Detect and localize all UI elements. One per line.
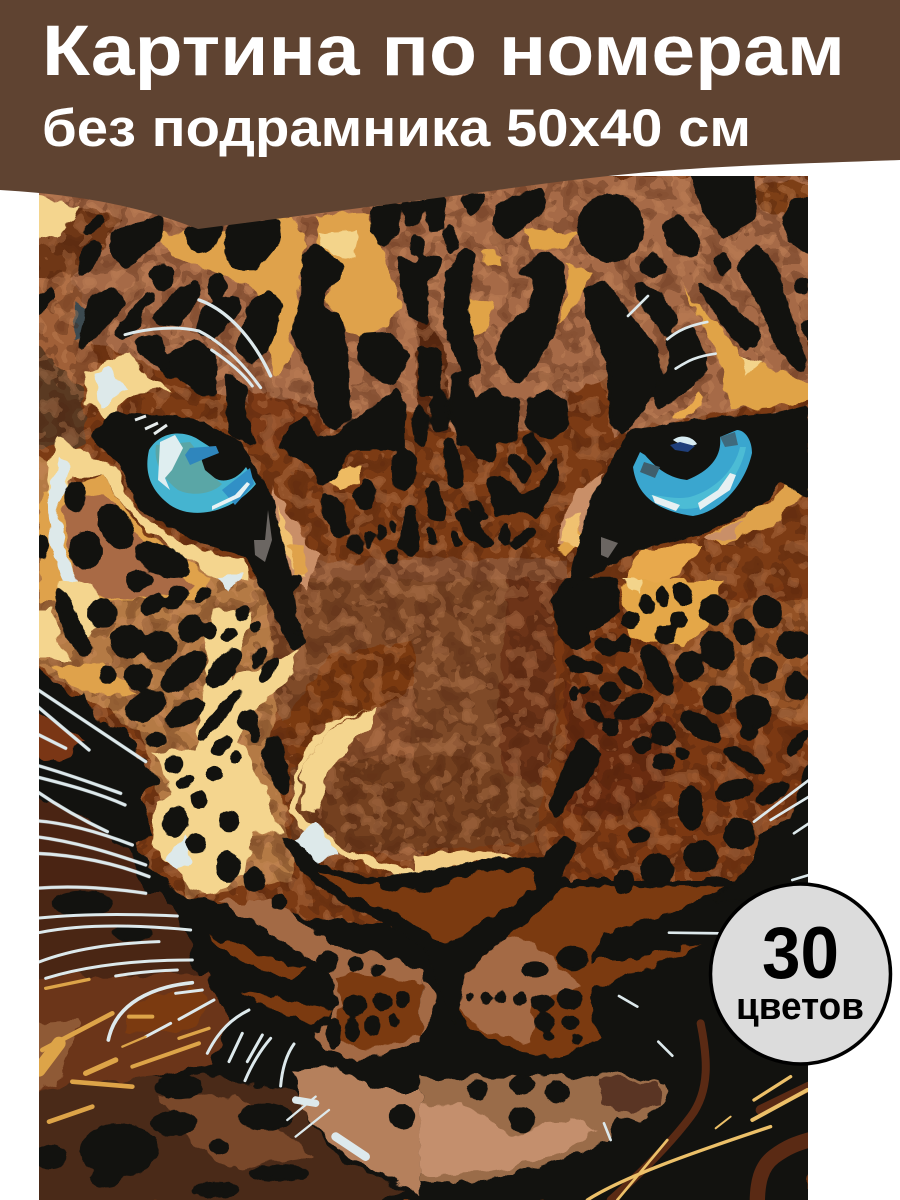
cream band under left eye	[39, 437, 319, 600]
forehead right	[421, 173, 811, 444]
nose rust fill	[318, 868, 537, 945]
left pad	[219, 900, 426, 1060]
header banner	[0, 0, 900, 229]
mottled fur texture: light	[39, 176, 808, 923]
left eye socket	[89, 413, 300, 640]
bottom left and mouth	[29, 890, 426, 1200]
painting: leopard face	[29, 173, 812, 1200]
center between eyes	[309, 428, 568, 584]
right cheek	[410, 576, 808, 820]
grey mark	[601, 537, 618, 558]
bottom right and right pad	[421, 880, 811, 1200]
left eye glint lines	[135, 416, 167, 434]
subtitle: без подрамника 50х40 см	[42, 99, 751, 158]
left eye	[89, 413, 300, 640]
gold strands lower right	[587, 1077, 807, 1200]
rust strands lower right	[611, 1023, 809, 1200]
mottled fur texture: dark	[39, 176, 808, 1200]
right forehead whiskers	[628, 296, 716, 369]
whisker pad dark	[39, 668, 182, 896]
fur colour regions	[29, 176, 811, 900]
forehead left	[36, 203, 426, 448]
lower whiskers	[36, 915, 366, 1157]
whiskers	[36, 296, 809, 1157]
grey tear mark	[254, 510, 272, 562]
left iris	[147, 434, 256, 513]
gold strands lower left	[39, 979, 209, 1122]
right iris	[633, 430, 752, 516]
nose	[282, 836, 577, 1010]
fur highlights	[29, 196, 811, 897]
right cheek spots	[549, 578, 812, 902]
forehead whiskers	[125, 300, 271, 388]
right eye catch light	[673, 437, 697, 446]
nose dark outline	[282, 836, 577, 1010]
right eye socket	[567, 405, 808, 590]
between the eyes	[288, 398, 565, 563]
lower left spots	[36, 892, 415, 1197]
badge label: цветов	[736, 986, 864, 1028]
title: Картина по номерам	[42, 12, 845, 91]
right eye	[567, 405, 808, 590]
badge number: 30	[762, 913, 839, 994]
fur strands	[39, 979, 809, 1200]
nose tip area	[291, 753, 544, 857]
black spots and markings	[36, 173, 812, 1197]
left cheek spots	[56, 577, 306, 892]
spots below left eye	[38, 482, 194, 600]
gold band under right eye	[560, 393, 808, 580]
left cheek	[29, 447, 426, 897]
cheek whiskers	[36, 688, 149, 893]
lower right spots	[466, 947, 588, 1133]
badge: 30 colours	[710, 884, 890, 1064]
right side whiskers	[604, 933, 719, 1140]
lower dark regions	[29, 660, 811, 1200]
